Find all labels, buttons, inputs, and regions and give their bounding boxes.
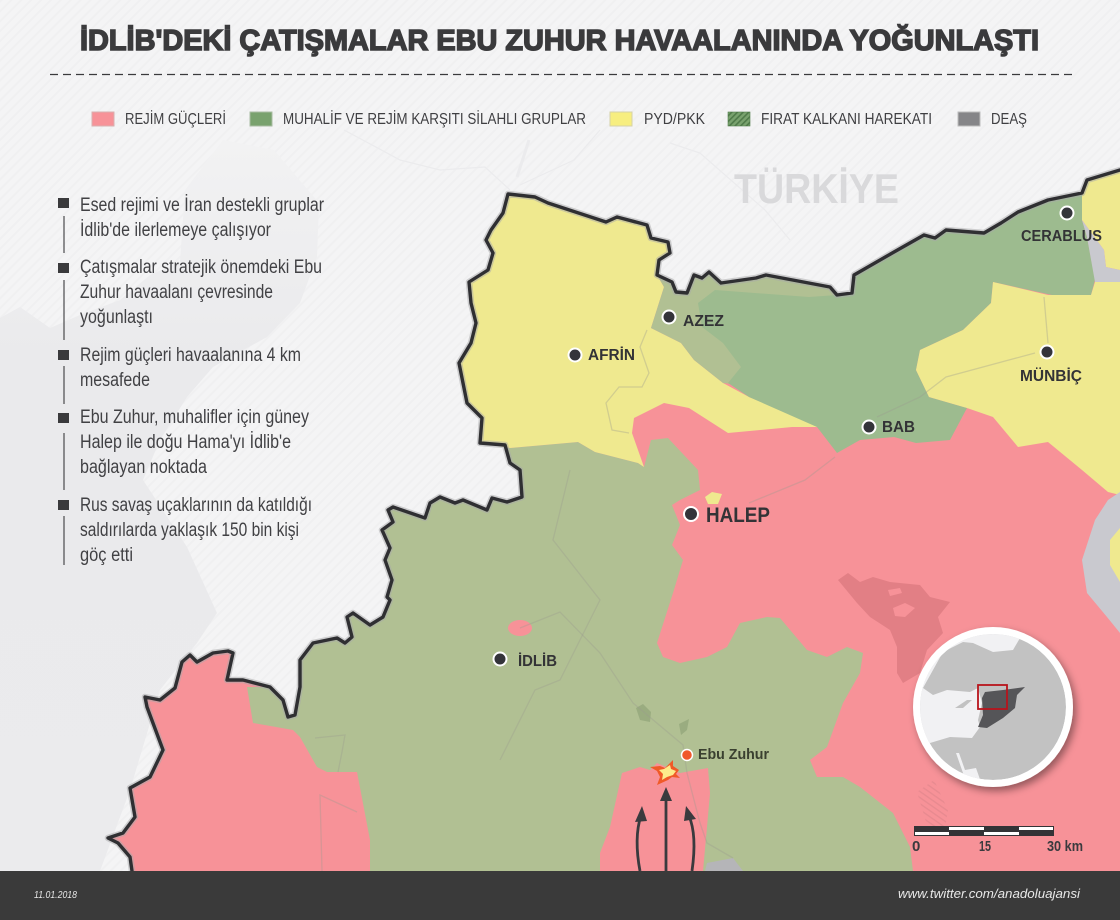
legend [92,109,1027,128]
city: Ebu Zuhur: Ebu Zuhur [698,746,769,763]
legend: ISIS: DEAŞ [991,111,1027,128]
yellow patch east [1110,528,1120,582]
country label: Türkiye: TÜRKİYE [734,165,899,212]
region: ISIS pocket [705,858,743,871]
scale bar [912,826,1083,855]
arrows: regime advance [635,787,696,871]
roads [315,297,1048,871]
city: Bab: BAB [882,419,915,436]
lake east [1082,492,1120,633]
scale bar: 30 km [1047,838,1083,855]
faint land lines [344,130,790,240]
bullet 1: İdlib'de ilerlemeye çalışıyor [80,220,272,241]
legend: Euphrates Shield: FIRAT KALKANI HAREKATI [761,111,932,128]
bullet 5: saldırılarda yaklaşık 150 bin kişi [80,520,299,541]
city: Halep [684,504,770,527]
bullet 1: Esed rejimi ve İran destekli gruplar [80,195,325,216]
region: Aleppo yellow spot [705,492,722,504]
small green patches [636,704,689,735]
map: Syria regions [108,170,1120,871]
locator rectangle [978,685,1007,709]
city: Afrin: AFRİN [588,346,635,364]
bullet list [58,195,325,566]
bullet 2 [58,257,322,340]
legend: PYD: PYD/PKK [644,111,705,128]
city: Munbic [1020,346,1082,385]
arrow: center [660,787,672,871]
footer [0,871,1120,920]
legend: PYD [610,111,705,128]
city: Azez: AZEZ [683,313,724,330]
city: Idlib: İDLİB [518,652,557,670]
inset locator map [900,620,1073,787]
city: Azez [662,310,724,330]
bullet 1 [58,195,325,253]
region: PYD Manbij [916,282,1120,495]
bullet 4 [58,407,309,490]
scale bar: 0 [912,838,920,855]
region: Azez light green [651,272,837,385]
arrow: left [635,806,647,871]
bullet 5: Rus savaş uçaklarının da katıldığı [80,495,312,516]
bullet 5: göç etti [80,545,133,566]
bullet 5 [58,495,312,566]
arrow: right [684,806,696,871]
bullet 2: Çatışmalar stratejik önemdeki Ebu [80,257,322,278]
icon: explosion [650,760,680,785]
legend: regime [92,109,226,128]
footer: www.twitter.com/anadoluajansi [898,887,1081,901]
title divider [50,74,1072,76]
footer: 11.01.2018 [34,890,77,901]
Jabbul lake [838,573,950,683]
legend: ISIS [958,111,1027,128]
region: opposition Idlib [247,438,913,871]
city: Munbic: MÜNBİÇ [1020,366,1082,385]
legend: opposition [250,109,586,128]
region: Idlib regime spot [508,620,532,636]
river east [1082,220,1120,282]
region: regime enclave south [600,763,710,871]
city: Halep: HALEP [706,504,770,527]
bullet 4: Halep ile doğu Hama'yı İdlib'e [80,432,291,453]
bullet 2: yoğunlaştı [80,307,153,328]
scale bar: 15 [979,838,991,855]
bullet 3: Rejim güçleri havaalanına 4 km [80,345,301,366]
bullet 3: mesafede [80,370,150,391]
city: Bab [862,419,915,436]
region: PYD north-east corner [1082,170,1120,270]
legend: opposition: MUHALİF VE REJİM KARŞITI SİLAHLI GRUPLAR [283,109,586,128]
bullet 2: Zuhur havaalanı çevresinde [80,282,273,303]
city: Cerablus [1021,206,1102,245]
hatched salt flat [917,780,948,835]
bullet 4: Ebu Zuhur, muhalifler için güney [80,407,309,428]
region: Euphrates Shield [698,193,1095,453]
city: Cerablus: CERABLUS [1021,228,1102,245]
city: Idlib [494,652,557,670]
city markers and labels [494,206,1102,763]
legend: regime: REJİM GÜÇLERİ [125,109,226,128]
bullet 4: bağlayan noktada [80,457,207,478]
region: PYD Afrin [459,194,817,467]
title: İDLİB'DEKİ ÇATIŞMALAR EBU ZUHUR HAVAALANINDA YOĞUNLAŞTI [80,23,1039,57]
Turkey-Syria border [108,170,1120,871]
sea area [0,140,319,871]
region: regime main [108,170,1120,871]
bullet 3 [58,345,301,404]
city: Afrin [568,346,635,364]
